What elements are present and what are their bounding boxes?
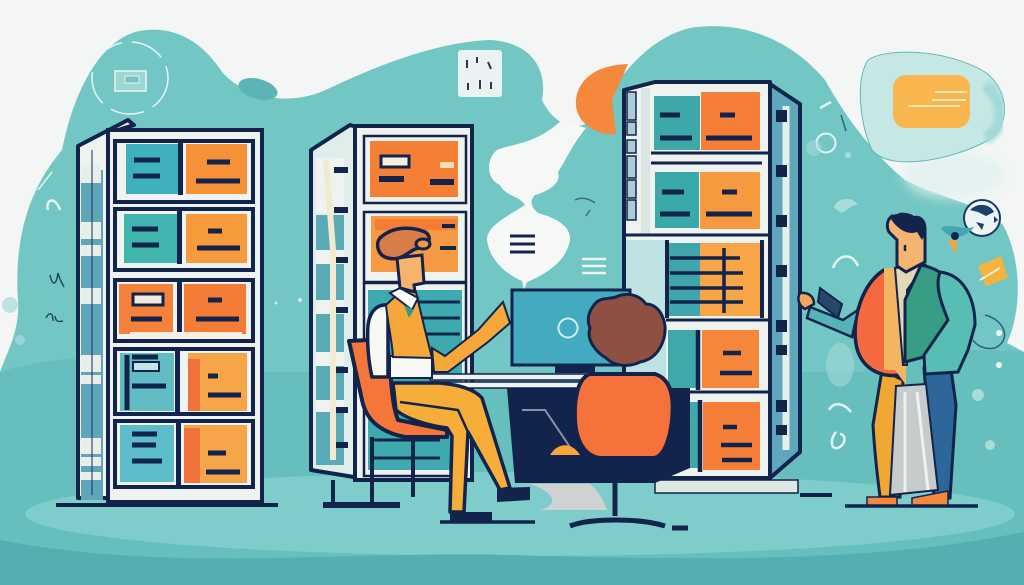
trousers blue — [924, 362, 956, 498]
chair back — [575, 374, 673, 458]
icon: orange blob — [576, 64, 628, 134]
person: curly haired person from behind — [570, 294, 688, 528]
rack 1 shelf 4 drawers — [120, 349, 247, 413]
rack 2 shelf 3 drawers — [368, 290, 462, 470]
hair — [891, 213, 926, 240]
rack 3 shelf rules — [626, 153, 770, 392]
trouser crease — [400, 402, 468, 432]
rack 2 side — [311, 125, 360, 478]
torso sleeve — [368, 305, 388, 377]
monitor — [512, 290, 630, 373]
trousers and legs — [393, 383, 510, 512]
head — [397, 255, 424, 292]
glow: pale wash under bubble — [905, 153, 1005, 197]
doodles: soft blobs — [2, 140, 995, 450]
floor: dark base band — [0, 532, 1024, 585]
rack 2 shelf 1 drawer — [370, 141, 458, 197]
rack 1 shelf 3 drawers — [119, 280, 246, 338]
shirt lower — [390, 356, 432, 378]
rack 3 shelf 3 drawers — [665, 240, 764, 318]
rack 1 shelf 1 drawers — [126, 141, 247, 195]
floor — [0, 350, 1024, 585]
shoes — [450, 487, 530, 522]
rack 3 body — [624, 82, 770, 478]
hair and glasses — [378, 228, 429, 259]
jacket orange — [855, 270, 900, 376]
rack 3 shelf 5 drawers — [670, 400, 760, 472]
rack 3 — [624, 82, 832, 495]
person: standing man — [798, 213, 978, 506]
sleeve left — [807, 307, 858, 337]
shoes — [867, 491, 948, 506]
rack 3 shelf 2 drawers — [655, 172, 760, 229]
rack 1 shelf 2 drawers — [124, 209, 247, 264]
rack 3 lower left panel — [626, 240, 666, 472]
rack 2 — [311, 125, 472, 505]
rack 3 base — [655, 480, 798, 493]
speech bubble: top right — [860, 52, 1005, 162]
speech cloud: white cloud and pointer — [487, 120, 606, 290]
hair — [588, 294, 665, 365]
icon: note card top centre — [458, 50, 502, 97]
rack 1 shelf backgrounds — [115, 141, 253, 487]
arm — [432, 302, 510, 372]
doodles: light marks on teal — [47, 102, 858, 448]
doodles: dark scribbles left — [38, 172, 64, 321]
rack 1 shelf 5 drawers — [120, 421, 247, 487]
rack 3 left strip — [627, 92, 636, 220]
icon: globe with fish — [941, 200, 1000, 254]
desk — [430, 374, 690, 510]
trousers grey — [890, 384, 938, 495]
rack 2 legs — [333, 480, 372, 505]
desk top — [430, 374, 585, 388]
neck and head — [887, 216, 925, 272]
shirt panel — [884, 268, 906, 385]
chair — [349, 339, 447, 437]
floor: light ellipse — [25, 472, 1015, 556]
vest — [386, 290, 432, 358]
desk underside — [507, 388, 690, 483]
phone — [818, 288, 842, 318]
rack 1 — [56, 120, 278, 505]
trousers orange — [873, 370, 903, 497]
jacket green — [905, 265, 955, 362]
person: seated man — [349, 228, 535, 522]
rack 1 baseline — [56, 503, 278, 507]
rack 1 side — [78, 120, 134, 498]
rack 2 front frame — [355, 126, 472, 480]
rack 2 shelf 2 drawer — [371, 216, 458, 272]
doodles: white dots and wire — [274, 115, 1005, 368]
background: faint wash top-left — [92, 42, 280, 114]
rack 1 front frame — [108, 130, 262, 502]
hand — [798, 293, 814, 309]
floor line under shoes — [440, 520, 535, 524]
sleeve right — [924, 272, 975, 374]
rack 3 shelf 1 drawers — [654, 92, 760, 150]
rack 3 side right — [770, 84, 800, 478]
chair legs — [372, 437, 413, 500]
rack 3 shelf 4 drawers — [668, 330, 759, 390]
chair post and base — [570, 460, 665, 526]
collar and tie — [390, 288, 418, 310]
icon: yellow note — [978, 256, 1008, 286]
desk shadow patch — [530, 484, 607, 510]
